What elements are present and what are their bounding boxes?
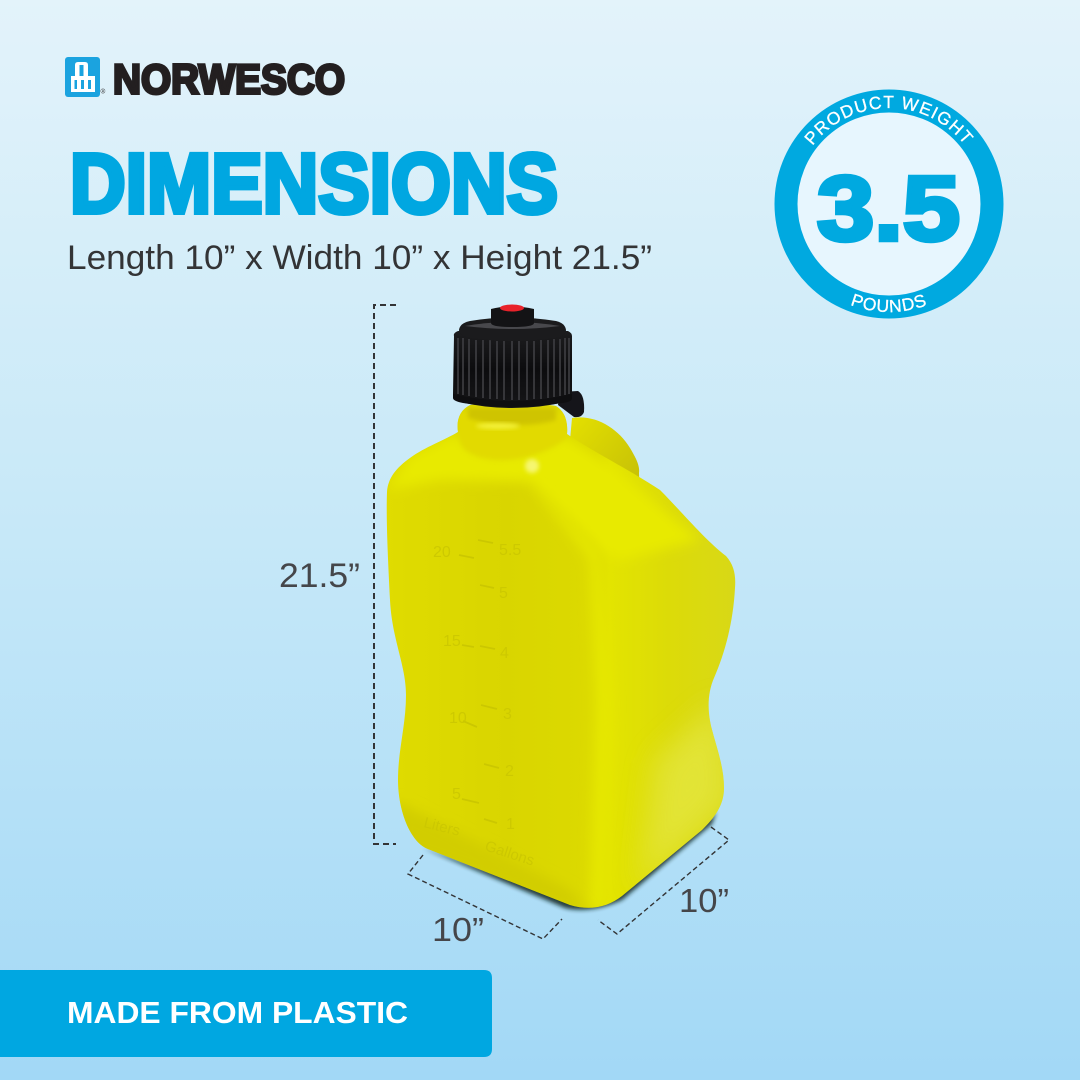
cap top (459, 318, 566, 341)
gallons scale (483, 542, 536, 870)
gallons scale: 4 (500, 645, 509, 662)
jug body (380, 400, 740, 915)
jug hose clip (558, 391, 584, 417)
badge label: product weight: PRODUCT WEIGHT (804, 96, 974, 145)
cap bottom ring (453, 394, 572, 407)
logo wordmark: NORWESCO (113, 56, 345, 102)
height label: 21.5” (279, 557, 360, 595)
cap vent knob (491, 306, 534, 327)
jug handle (570, 417, 640, 500)
gallons scale: 3 (503, 706, 512, 723)
jug upper shoulder highlight (387, 432, 700, 560)
subtitle: overall dimensions: Length 10” x Width 10” x Height 21.5” (67, 239, 652, 277)
base width dimension line (598, 827, 729, 934)
liters scale: 20 (433, 544, 451, 561)
liters scale: 15 (443, 633, 461, 650)
icon: Norwesco square mark (65, 57, 100, 97)
base length label: 10” (432, 911, 484, 948)
gallons scale: Gallons (483, 838, 536, 870)
jug lower shade (400, 800, 582, 908)
cap collar (453, 331, 572, 408)
jug side highlight (640, 700, 730, 890)
gallons scale: 1 (506, 816, 515, 833)
title: DIMENSIONS (70, 136, 558, 230)
base width label: 10” (679, 882, 729, 919)
base length dimension line (408, 855, 562, 939)
cap red vent (500, 304, 524, 312)
gallons scale: 5.5 (499, 542, 521, 559)
jug neck highlights (476, 423, 520, 429)
banner text: MADE FROM PLASTIC (67, 995, 408, 1030)
liters scale: Liters (422, 814, 462, 840)
gallons scale: 5 (499, 585, 508, 602)
logo registered mark: ® (100, 88, 106, 96)
jug measuring marks (422, 540, 536, 870)
material banner (0, 970, 492, 1057)
badge value: 3.5: 3.5 (817, 158, 960, 260)
liters scale: 10 (449, 710, 467, 727)
jug product image (380, 304, 740, 915)
height dimension line (374, 305, 396, 844)
jug ground shadow (423, 812, 716, 910)
liters scale (422, 544, 467, 840)
badge: product weight (774, 90, 1004, 318)
badge unit: pounds: POUNDS (851, 294, 926, 312)
cap ribs (458, 338, 569, 400)
tick marks (459, 540, 499, 823)
jug neck (457, 412, 568, 459)
jug front corner ridge (582, 544, 610, 908)
gallons scale: 2 (505, 763, 514, 780)
logo: Norwesco (65, 56, 345, 102)
liters scale: 5 (452, 786, 461, 803)
jug cap (453, 304, 572, 408)
